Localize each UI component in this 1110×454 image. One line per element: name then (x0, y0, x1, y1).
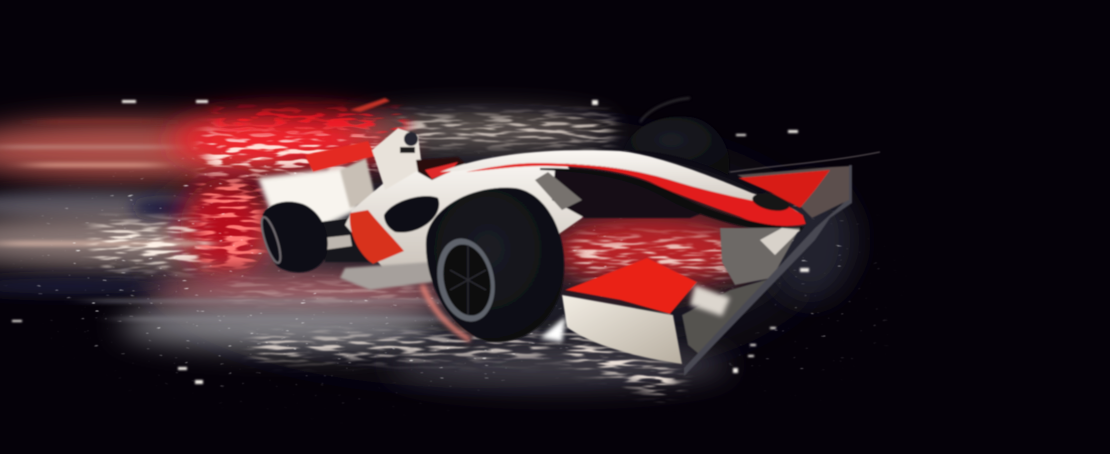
nose tip dark (751, 190, 791, 214)
nose cone white (440, 150, 802, 215)
group: red streaks (215, 112, 405, 134)
side pod and body (345, 155, 590, 280)
side pod red panel (350, 210, 404, 264)
lower floor (340, 262, 432, 290)
group: isolated sparks (12, 98, 809, 384)
group: white speckle streaks, left (95, 118, 735, 397)
group: background glow (0, 112, 855, 387)
group: car (258, 98, 880, 376)
front tyre (426, 188, 564, 342)
upper far tyre (624, 117, 729, 175)
rear wing (305, 141, 376, 208)
rear glow white (258, 167, 358, 228)
nose underline dark (540, 168, 804, 232)
side pod inlet (384, 196, 439, 232)
front wing (562, 152, 880, 376)
nose red stripe (466, 163, 806, 226)
front suspension area (720, 228, 800, 285)
wheel sparks (422, 285, 470, 340)
group: bright speckles on red (200, 130, 375, 265)
group: sparks (30, 150, 880, 390)
hood arc (640, 98, 690, 122)
rear suspension (320, 212, 392, 262)
group: speed streaks (0, 120, 470, 320)
front suspension (535, 172, 582, 210)
under nose dark (552, 170, 700, 218)
rear tyre (258, 202, 328, 272)
cockpit and driver (372, 128, 466, 190)
